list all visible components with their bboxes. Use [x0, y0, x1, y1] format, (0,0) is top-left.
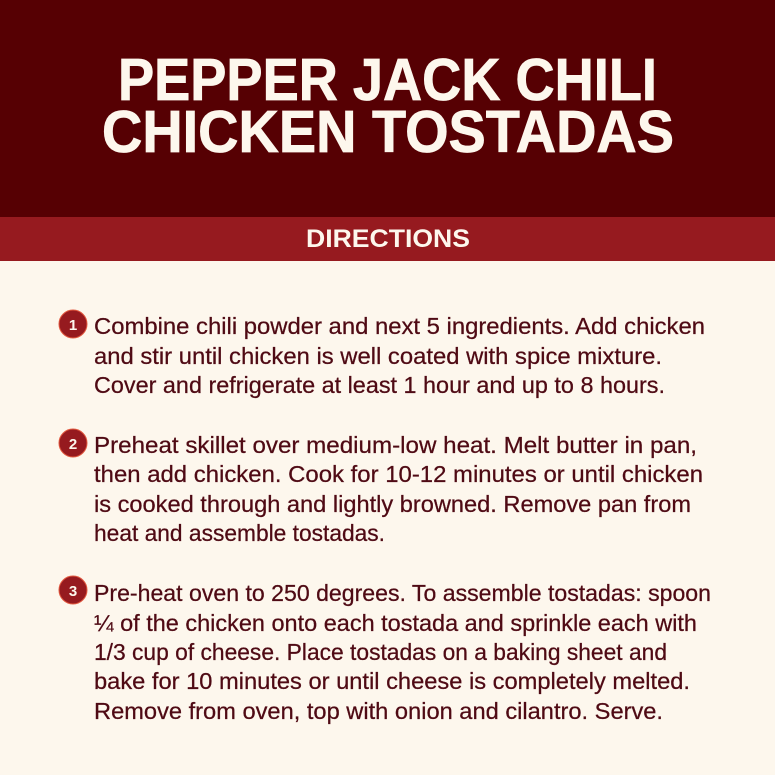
step 3 text: Remove from oven, top with onion and cilantro. Serve. [94, 698, 663, 724]
title: PEPPER JACK CHILI [118, 47, 657, 113]
icon: number 1 badge [59, 310, 87, 338]
step 1 text: and stir until chicken is well coated with spice mixture. [94, 343, 662, 369]
title: CHICKEN TOSTADAS [102, 99, 674, 165]
step 2 text: is cooked through and lightly browned. Remove pan from [94, 491, 691, 517]
icon: number 1 badge: 1 [69, 317, 77, 334]
step 2 [59, 429, 703, 546]
step 2 text: heat and assemble tostadas. [94, 520, 385, 546]
step 3 text: ¼ of the chicken onto each tostada and sprinkle each with [94, 610, 697, 636]
step 3 text [94, 580, 711, 724]
directions heading: DIRECTIONS [306, 225, 470, 253]
step 1 [59, 310, 705, 398]
step 2 text [94, 432, 703, 546]
step 3 text: bake for 10 minutes or until cheese is completely melted. [94, 668, 690, 694]
step 1 text: Cover and refrigerate at least 1 hour and up to 8 hours. [94, 372, 665, 398]
header panel [0, 0, 775, 217]
step 2 text: Preheat skillet over medium-low heat. Melt butter in pan, [94, 432, 697, 458]
step 3 [59, 576, 711, 724]
icon: number 3 badge [59, 576, 87, 604]
icon: number 2 badge [59, 429, 87, 457]
step 3 text: Pre-heat oven to 250 degrees. To assemble tostadas: spoon [94, 580, 711, 606]
step 1 text: Combine chili powder and next 5 ingredients. Add chicken [94, 313, 705, 339]
step 1 text [94, 313, 705, 398]
directions band [0, 217, 775, 261]
title [102, 47, 674, 165]
step 3 text: 1/3 cup of cheese. Place tostadas on a baking sheet and [94, 639, 667, 665]
step 2 text: then add chicken. Cook for 10-12 minutes or until chicken [94, 461, 703, 487]
icon: number 3 badge: 3 [69, 583, 77, 600]
icon: number 2 badge: 2 [69, 436, 77, 453]
